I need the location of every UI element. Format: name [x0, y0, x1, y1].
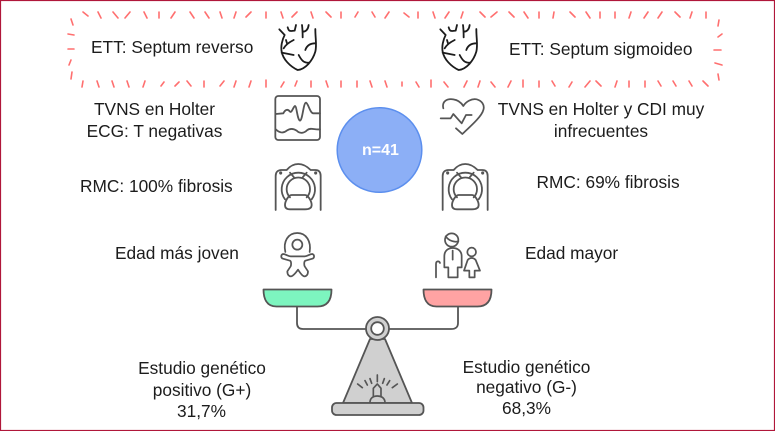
icon: heart left — [279, 25, 316, 70]
scale right pan — [424, 290, 492, 306]
text: TVNS and CDI — [498, 99, 705, 141]
text: genetic positive: 31,7% — [177, 401, 226, 421]
text: genetic negative — [463, 357, 590, 418]
text: ETT septum sigmoideo: ETT: Septum sigmoideo — [509, 39, 692, 59]
icon: MRI left — [276, 164, 321, 210]
text: genetic negative: 68,3% — [502, 398, 551, 418]
text: RMC 69 percent: RMC: 69% fibrosis — [536, 172, 680, 192]
balance scale — [264, 290, 492, 415]
icon: baby — [281, 233, 314, 276]
scale base — [332, 403, 424, 415]
icon: heart right — [440, 25, 477, 70]
scale pivot — [366, 317, 389, 340]
icon: ECG monitor — [275, 96, 320, 140]
text: TVNS Holter and ECG: TVNS en Holter — [94, 99, 215, 119]
text: genetic positive: positivo (G+) — [153, 380, 251, 400]
text: older age: Edad mayor — [525, 243, 618, 263]
text: ETT septum reverso: ETT: Septum reverso — [91, 37, 253, 57]
text: younger age: Edad más joven — [115, 243, 239, 263]
scale left pan — [264, 290, 332, 306]
icon: heart with pulse — [441, 99, 484, 134]
icon: elder and child — [436, 233, 480, 277]
text: RMC 100 percent: RMC: 100% fibrosis — [80, 176, 233, 196]
text: TVNS Holter and ECG — [87, 99, 223, 141]
text: genetic negative: Estudio genético — [463, 357, 590, 377]
circle: sample size — [337, 108, 422, 192]
scale light — [358, 375, 397, 403]
scale triangle stand — [343, 339, 412, 403]
text: TVNS and CDI: TVNS en Holter y CDI muy — [498, 99, 705, 119]
text: genetic negative: negativo (G-) — [476, 377, 577, 397]
text: genetic positive: Estudio genético — [138, 358, 266, 378]
text: TVNS Holter and ECG: ECG: T negativas — [87, 121, 223, 141]
dashed red highlight frame — [68, 12, 722, 87]
text: genetic positive — [138, 358, 266, 421]
icon: MRI right — [443, 164, 488, 210]
circle: sample size: n=41 — [362, 142, 399, 159]
scale beam — [297, 306, 458, 329]
text: TVNS and CDI: infrecuentes — [554, 121, 648, 141]
